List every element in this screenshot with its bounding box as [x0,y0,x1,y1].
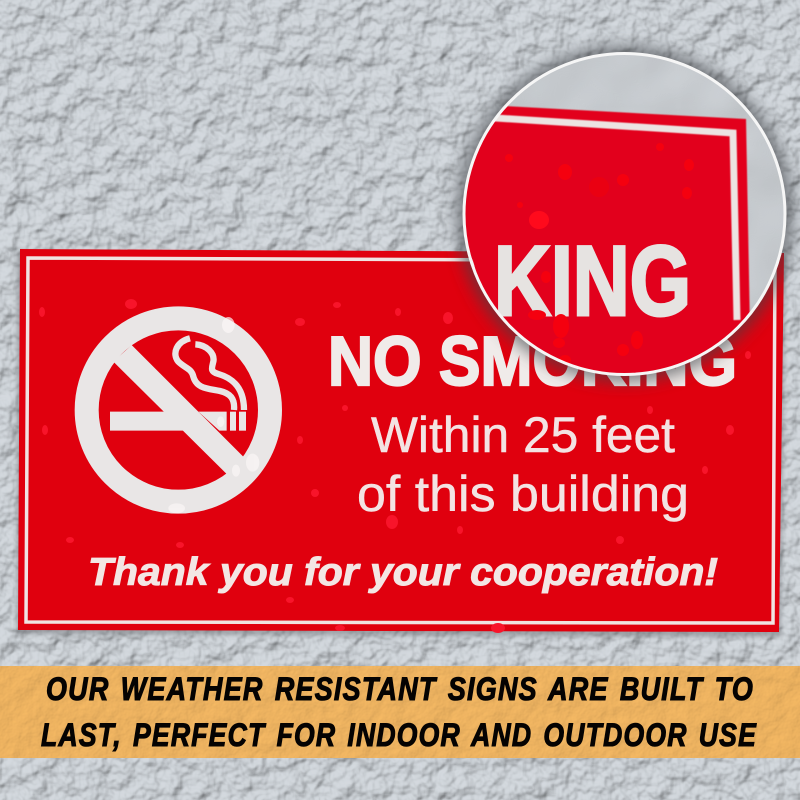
text: Within 25 feet: Within 25 feet [371,407,675,463]
magnified sign board [466,106,750,373]
cigarette [110,412,246,431]
prohibition ring [87,318,270,502]
text: of this building: of this building [357,466,689,522]
magnified droplets [505,143,694,365]
banner: weather resistant message [0,666,800,758]
text: thank you line: Thank you for your cooperation! [88,551,718,594]
heading: NO SMOKING: NO SMOKING [328,322,737,400]
magnified lettering: KING [494,225,691,336]
magnifier shadow [456,46,792,382]
banner background [0,666,800,758]
sign board [18,249,784,632]
icon droplets [168,317,259,513]
lens contents [466,55,784,373]
panel: red no smoking sign [17,249,785,637]
water droplets on sign [39,299,751,633]
magnified lettering [472,244,688,318]
panel: magnified sign corner [462,52,786,376]
smoke trails [175,338,244,410]
sign shadow [17,252,785,637]
magnified lettering: O [422,225,478,336]
prohibition slash [113,345,245,474]
lens wall background [507,55,784,313]
lens ring [464,54,785,374]
magnified border [480,117,737,320]
icon: no smoking symbol [87,317,270,513]
sign white border [26,258,775,623]
